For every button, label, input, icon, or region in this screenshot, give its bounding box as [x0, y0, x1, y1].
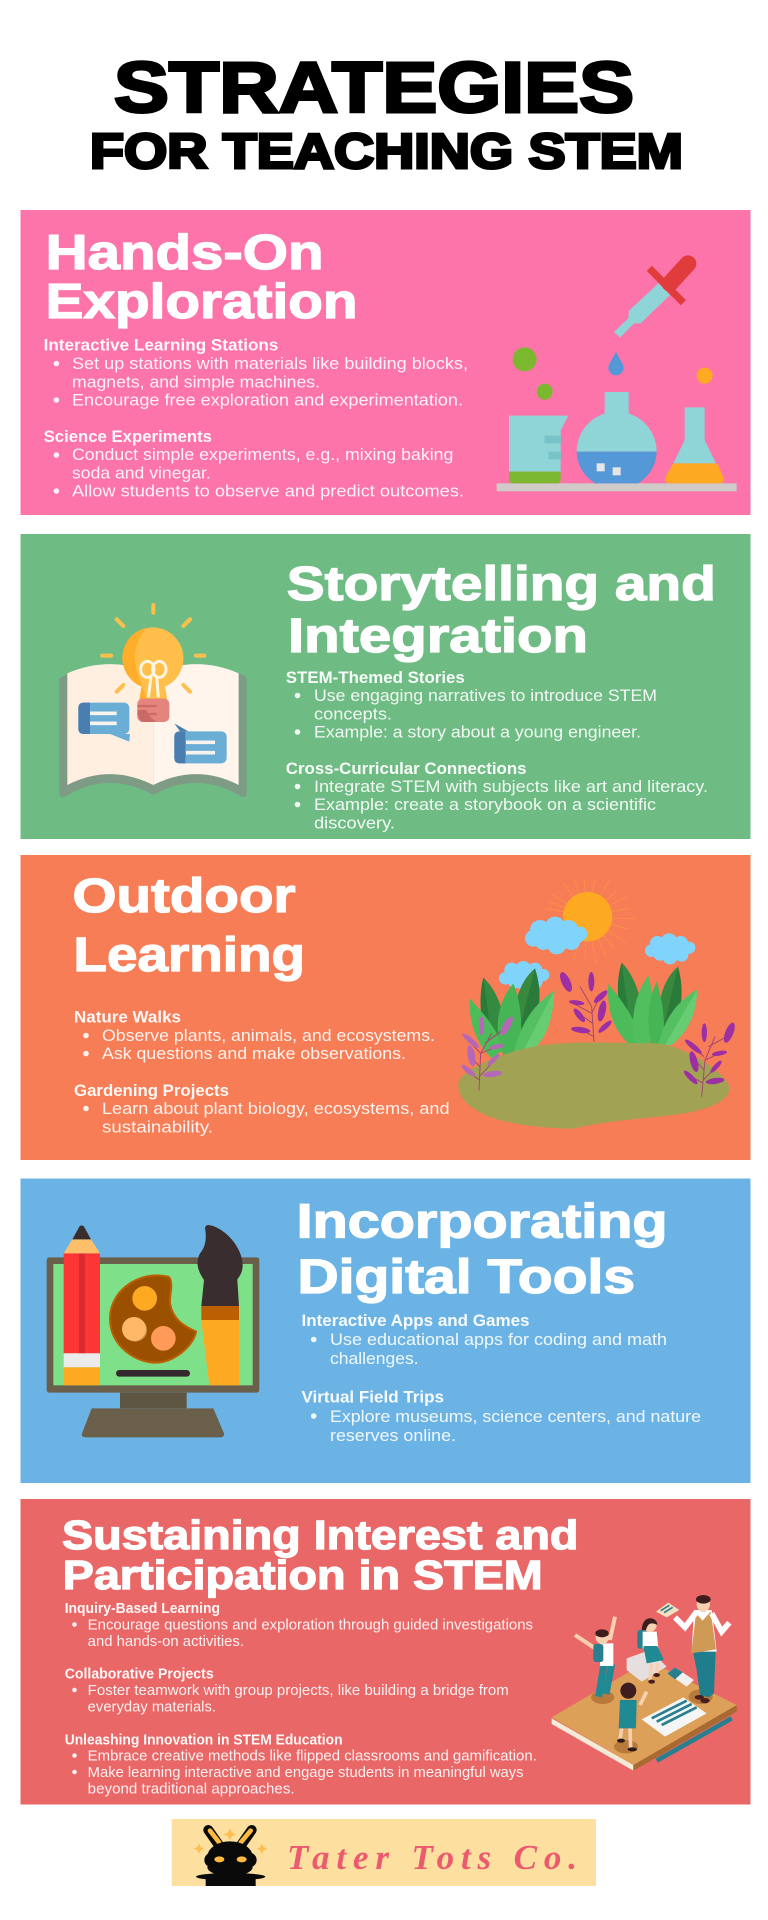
text block: stem-themed stories: STEM-Themed Stories: [286, 669, 465, 687]
text block: virtual field trips: Virtual Field Trips: [302, 1388, 444, 1406]
heading: incorporating digital tools: Incorporating: [297, 1196, 668, 1249]
icon: black rabbit mascot: [194, 1828, 267, 1886]
text block: cross-curricular connections: discovery.: [314, 814, 395, 832]
text block: stem-themed stories: [286, 669, 657, 742]
text block: interactive learning stations: Encourage free exploration and experimentation.: [72, 392, 463, 410]
logo text: Tater Tots Co.: [287, 1838, 577, 1877]
text block: cross-curricular connections: [286, 760, 708, 832]
teacher: [656, 1595, 729, 1704]
text block: unleashing innovation: beyond traditional approaches.: [88, 1782, 295, 1798]
text block: unleashing innovation: [65, 1732, 537, 1798]
heading: outdoor learning: [72, 870, 305, 982]
icon: teacher and students on a book: [552, 1595, 737, 1771]
text block: cross-curricular connections: Cross-Curricular Connections: [286, 760, 526, 778]
heading: outdoor learning: Learning: [74, 929, 305, 982]
heading: hands-on exploration: Exploration: [46, 275, 358, 329]
text block: inquiry-based learning: Inquiry-Based Learning: [65, 1601, 220, 1617]
heading: storytelling and integration: Integration: [288, 610, 588, 663]
text block: interactive apps and games: Interactive Apps and Games: [302, 1312, 530, 1330]
icon: monitor with pencil, palette and brush: [47, 1225, 259, 1437]
text block: interactive learning stations: Set up stations with materials like building blocks,: [72, 355, 468, 373]
text block: science experiments: Science Experiments: [44, 428, 212, 446]
text block: gardening projects: sustainability.: [102, 1119, 213, 1137]
text block: interactive learning stations: Interactive Learning Stations: [44, 336, 278, 354]
title: STRATEGIES: [114, 49, 634, 128]
heading: incorporating digital tools: Digital Tools: [298, 1251, 635, 1304]
panel: storytelling and integration: [20, 534, 750, 839]
text block: interactive learning stations: [44, 336, 468, 410]
heading: sustaining interest: [62, 1512, 578, 1598]
text block: unleashing innovation: Embrace creative methods like flipped classrooms and gamification.: [88, 1748, 537, 1764]
heading: sustaining interest: Sustaining Interest and: [62, 1512, 578, 1558]
panel: incorporating digital tools: [20, 1178, 750, 1483]
panel: sustaining interest and participation: [20, 1499, 750, 1804]
text block: stem-themed stories: Use engaging narratives to introduce STEM: [314, 687, 657, 705]
text block: collaborative projects: Foster teamwork with group projects, like building a bridge from: [88, 1683, 509, 1699]
heading: hands-on exploration: [46, 226, 358, 329]
heading: incorporating digital tools: [297, 1196, 668, 1304]
text block: inquiry-based learning: [65, 1601, 533, 1650]
text block: gardening projects: Learn about plant biology, ecosystems, and: [102, 1100, 450, 1118]
text block: interactive learning stations: magnets, and simple machines.: [72, 373, 320, 391]
text block: inquiry-based learning: and hands-on activities.: [88, 1634, 244, 1650]
text block: interactive apps and games: [302, 1312, 667, 1368]
text block: gardening projects: Gardening Projects: [74, 1082, 229, 1100]
icon: lab flasks and dropper: [497, 264, 737, 491]
text block: unleashing innovation: Unleashing Innovation in STEM Education: [65, 1732, 343, 1748]
text block: collaborative projects: Collaborative Projects: [65, 1666, 214, 1682]
text block: interactive apps and games: Use educational apps for coding and math: [330, 1331, 667, 1349]
text block: cross-curricular connections: Example: create a storybook on a scientific: [314, 796, 656, 814]
icon: garden with sun, clouds and plants: [458, 878, 737, 1129]
heading: storytelling and integration: Storytelling and: [287, 558, 716, 611]
text block: nature walks: Observe plants, animals, and ecosystems.: [102, 1027, 435, 1045]
heading: hands-on exploration: Hands-On: [46, 226, 324, 280]
text block: stem-themed stories: concepts.: [314, 705, 392, 723]
text block: science experiments: Allow students to observe and predict outcomes.: [72, 483, 464, 501]
front student: [614, 1683, 647, 1753]
cloud shapes: [499, 917, 695, 992]
heading: sustaining interest: Participation in STEM: [63, 1552, 543, 1598]
student with raised arms: [575, 1617, 615, 1704]
text block: inquiry-based learning: Encourage questions and exploration through guided investigations: [88, 1618, 533, 1634]
text block: unleashing innovation: Make learning interactive and engage students in meaningful ways: [88, 1765, 523, 1781]
logo banner: [172, 1819, 596, 1886]
text block: science experiments: Conduct simple experiments, e.g., mixing baking: [72, 446, 453, 464]
panel: hands-on exploration: [20, 210, 750, 515]
panel: outdoor learning: [20, 855, 750, 1160]
heading: outdoor learning: Outdoor: [72, 870, 296, 923]
heading: storytelling and integration: [287, 558, 716, 663]
text block: virtual field trips: reserves online.: [330, 1427, 456, 1445]
text block: nature walks: Ask questions and make observations.: [102, 1045, 406, 1063]
title: [90, 49, 683, 179]
text block: virtual field trips: [302, 1388, 701, 1445]
text block: interactive apps and games: challenges.: [330, 1350, 419, 1368]
text block: collaborative projects: everyday materials.: [88, 1700, 216, 1716]
text block: gardening projects: [74, 1082, 450, 1137]
text block: virtual field trips: Explore museums, science centers, and nature: [330, 1408, 701, 1426]
text block: collaborative projects: [65, 1666, 509, 1716]
text block: stem-themed stories: Example: a story about a young engineer.: [314, 724, 641, 742]
text block: science experiments: [44, 428, 464, 501]
icon: open book with light bulb: [59, 605, 247, 797]
text block: nature walks: [74, 1008, 435, 1063]
text block: cross-curricular connections: Integrate STEM with subjects like art and literacy.: [314, 778, 708, 796]
text block: nature walks: Nature Walks: [74, 1008, 181, 1026]
text block: science experiments: soda and vinegar.: [72, 464, 211, 482]
title: FOR TEACHING STEM: [90, 125, 683, 179]
seated student: [637, 1618, 664, 1684]
